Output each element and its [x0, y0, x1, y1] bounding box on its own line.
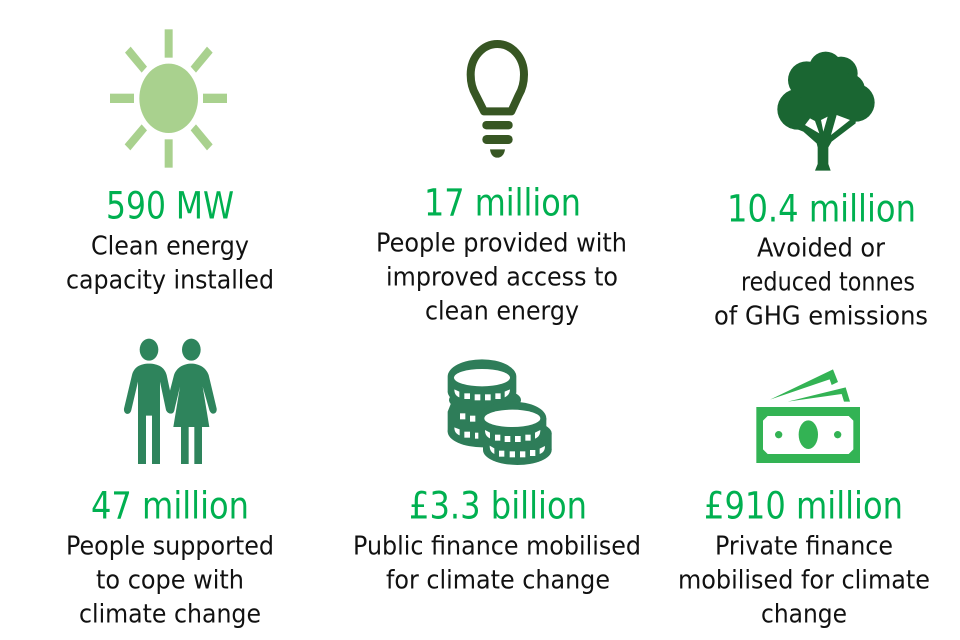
panel: clean energy capacity [66, 29, 274, 295]
panel: people supported [66, 339, 274, 630]
description: avoided or reduced tonnes of GHG emissions: reduced tonnes [741, 268, 915, 298]
description: avoided or reduced tonnes of GHG emissions: Avoided or [757, 234, 885, 264]
description: private finance mobilised for climate change: Private finance [715, 532, 893, 562]
description: avoided or reduced tonnes of GHG emissions [714, 234, 928, 332]
panel: private finance [678, 369, 930, 630]
icon: tree [777, 52, 875, 171]
stat: 17 million: 17 million [424, 182, 581, 224]
stat: £910 million: £910 million [704, 484, 903, 528]
stat: £3.3 billion: £3.3 billion [409, 484, 587, 528]
stat: 10.4 million: 10.4 million [727, 188, 916, 230]
description: avoided or reduced tonnes of GHG emissions: of GHG emissions [714, 302, 928, 332]
icon: coin stacks [448, 359, 552, 465]
description: people provided with improved access [376, 228, 627, 326]
description: clean energy capacity installed [66, 232, 274, 296]
icon: sun [110, 29, 227, 168]
icon: man and woman holding hands [124, 339, 217, 464]
description: private finance mobilised for climate change: mobilised for climate [678, 566, 930, 596]
description: people supported to cope with climate change: climate change [79, 600, 261, 630]
description: clean energy capacity installed: Clean energy [91, 232, 249, 262]
stat: 590 MW: 590 MW [106, 184, 234, 228]
stat: 47 million: 47 million [91, 484, 249, 528]
description: people provided with improved access: People provided with [376, 228, 627, 258]
icon: light bulb [471, 44, 524, 158]
description: public finance mobilised for climate change [353, 532, 641, 596]
description: clean energy capacity installed: capacity installed [66, 266, 274, 296]
description: private finance mobilised for climate change [678, 532, 930, 630]
description: private finance mobilised for climate change: change [761, 600, 847, 630]
description: people supported to cope with climate change: People supported [66, 532, 274, 562]
panel: avoided emissions [714, 52, 928, 331]
icon: banknotes [756, 369, 860, 463]
description: people provided with improved access: clean energy [425, 296, 579, 326]
description: people supported to cope with climate change [66, 532, 274, 630]
panel: public finance [353, 359, 641, 596]
description: people supported to cope with climate change: to cope with [96, 566, 244, 596]
panel: access to clean energy [376, 44, 627, 327]
description: public finance mobilised for climate change: Public finance mobilised [353, 532, 641, 562]
description: public finance mobilised for climate change: for climate change [386, 566, 610, 596]
description: people provided with improved access: improved access to [386, 262, 618, 292]
